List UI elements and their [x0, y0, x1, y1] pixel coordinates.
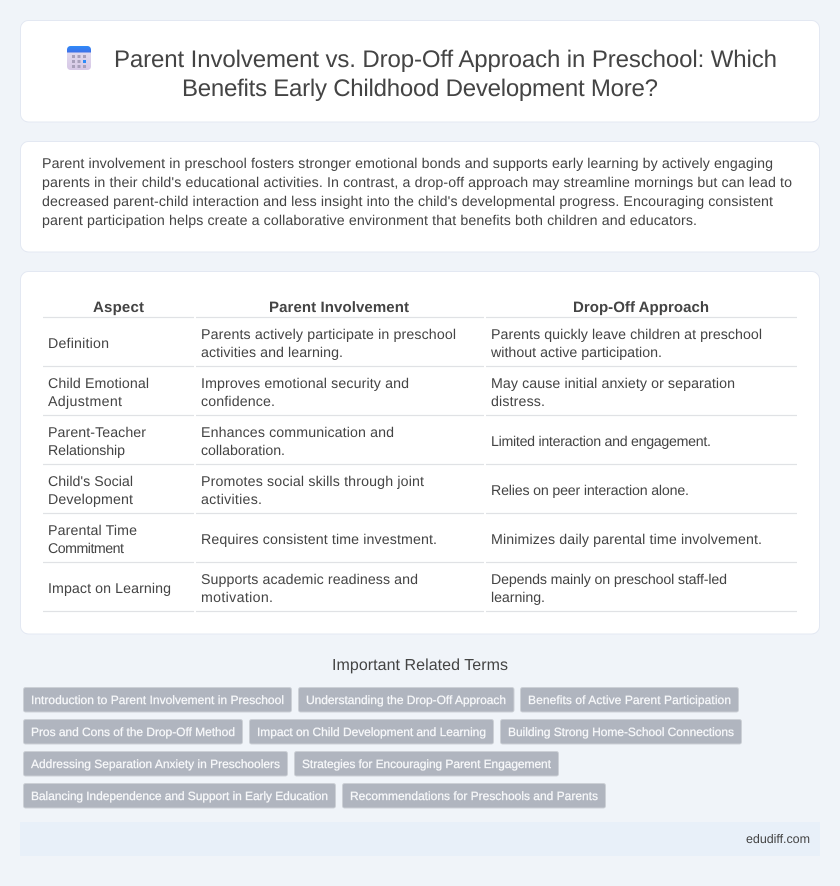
tag [250, 720, 494, 744]
row: definition [48, 327, 762, 361]
tag: Strategies for Encouraging Parent Engagement [302, 757, 552, 771]
tag [342, 784, 606, 808]
table header row: Aspect [93, 299, 144, 316]
row: definition: Definition [48, 336, 109, 352]
row: child emotional adjustment: Child Emotional [48, 376, 149, 392]
row: impact on learning: Impact on Learning [48, 581, 171, 597]
row: child emotional adjustment: May cause initial anxiety or separation [491, 376, 735, 392]
row: child's social development: Child's Social [48, 474, 133, 490]
heading: important related terms: Important Related Terms [332, 657, 508, 674]
tag: Understanding the Drop-Off Approach [306, 693, 506, 707]
footer [20, 822, 820, 856]
panel: title header [20, 20, 820, 122]
tag [24, 752, 288, 776]
row: parental time commitment: Requires consistent time investment. [201, 532, 437, 548]
tag: Balancing Independence and Support in Early Education [31, 789, 328, 803]
row: parent-teacher relationship [48, 425, 711, 459]
row: child's social development: Development [48, 492, 133, 508]
row: child emotional adjustment: distress. [491, 394, 545, 410]
text block: introduction paragraph [42, 156, 792, 229]
tag: Addressing Separation Anxiety in Preschoolers [31, 757, 280, 771]
row: impact on learning [48, 572, 727, 606]
table header row: Parent Involvement [269, 299, 409, 316]
text block: introduction paragraph: parent participation helps create a collaborative environment that benefits both children and educators. [42, 213, 697, 229]
footer: edudiff.com [746, 832, 810, 846]
tag: Building Strong Home-School Connections [508, 725, 734, 739]
tag [298, 688, 514, 712]
row: parent-teacher relationship: Parent-Teacher [48, 425, 146, 441]
tag: Impact on Child Development and Learning [257, 725, 486, 739]
icon: calendar [67, 46, 91, 70]
row: parental time commitment: Commitment [48, 541, 124, 557]
tag: Introduction to Parent Involvement in Preschool [31, 693, 284, 707]
row: child's social development: Relies on peer interaction alone. [491, 483, 689, 499]
tag: Pros and Cons of the Drop-Off Method [31, 725, 235, 739]
tag [520, 688, 738, 712]
row: definition: without active participation. [490, 345, 662, 361]
table header row: Drop-Off Approach [573, 299, 709, 316]
row: child emotional adjustment: Improves emotional security and [201, 376, 409, 392]
text block: introduction paragraph: decreased parent-child interaction and less insight into the child's developmental progress. Encouraging consistent [42, 194, 773, 210]
row: child emotional adjustment [48, 376, 735, 410]
title: Benefits Early Childhood Development More? [182, 75, 658, 102]
row: child emotional adjustment: confidence. [201, 394, 275, 410]
title: Parent Involvement vs. Drop-Off Approach in Preschool: Which [114, 46, 777, 73]
row: parent-teacher relationship: Relationship [48, 443, 125, 459]
tag [500, 720, 742, 744]
row: parental time commitment [48, 523, 762, 557]
tag: Recommendations for Preschools and Parents [350, 789, 598, 803]
title [114, 46, 777, 102]
row: parent-teacher relationship: Limited interaction and engagement. [491, 434, 711, 450]
row: parent-teacher relationship: collaboration. [201, 443, 285, 459]
row: impact on learning: Supports academic readiness and [201, 572, 418, 588]
row: definition: Parents quickly leave children at preschool [491, 327, 762, 343]
tag [24, 688, 292, 712]
panel: comparison table [20, 272, 820, 634]
row: parental time commitment: Minimizes daily parental time involvement. [491, 532, 762, 548]
row: impact on learning: Depends mainly on preschool staff-led [491, 572, 727, 588]
row: child emotional adjustment: Adjustment [48, 394, 122, 410]
panel: description [20, 142, 820, 252]
tag [294, 752, 558, 776]
text block: introduction paragraph: Parent involvement in preschool fosters stronger emotional bonds and supports early learning by actively engaging [42, 156, 773, 172]
row: child's social development [48, 474, 689, 508]
row: impact on learning: motivation. [201, 590, 273, 606]
tag [24, 720, 242, 744]
row: child's social development: activities. [201, 492, 262, 508]
row: parental time commitment: Parental Time [48, 523, 137, 539]
tags: related terms [24, 688, 742, 808]
text block: introduction paragraph: parents in their child's educational activities. In contrast, a drop-off approach may streamline mornings but can lead to [42, 175, 792, 191]
table header row [93, 299, 709, 316]
row: definition: Parents actively participate in preschool [201, 327, 456, 343]
row: child's social development: Promotes social skills through joint [201, 474, 424, 490]
tag: Benefits of Active Parent Participation [528, 693, 731, 707]
tag [24, 784, 336, 808]
row: parent-teacher relationship: Enhances communication and [201, 425, 394, 441]
row: definition: activities and learning. [201, 345, 343, 361]
row: impact on learning: learning. [491, 590, 545, 606]
